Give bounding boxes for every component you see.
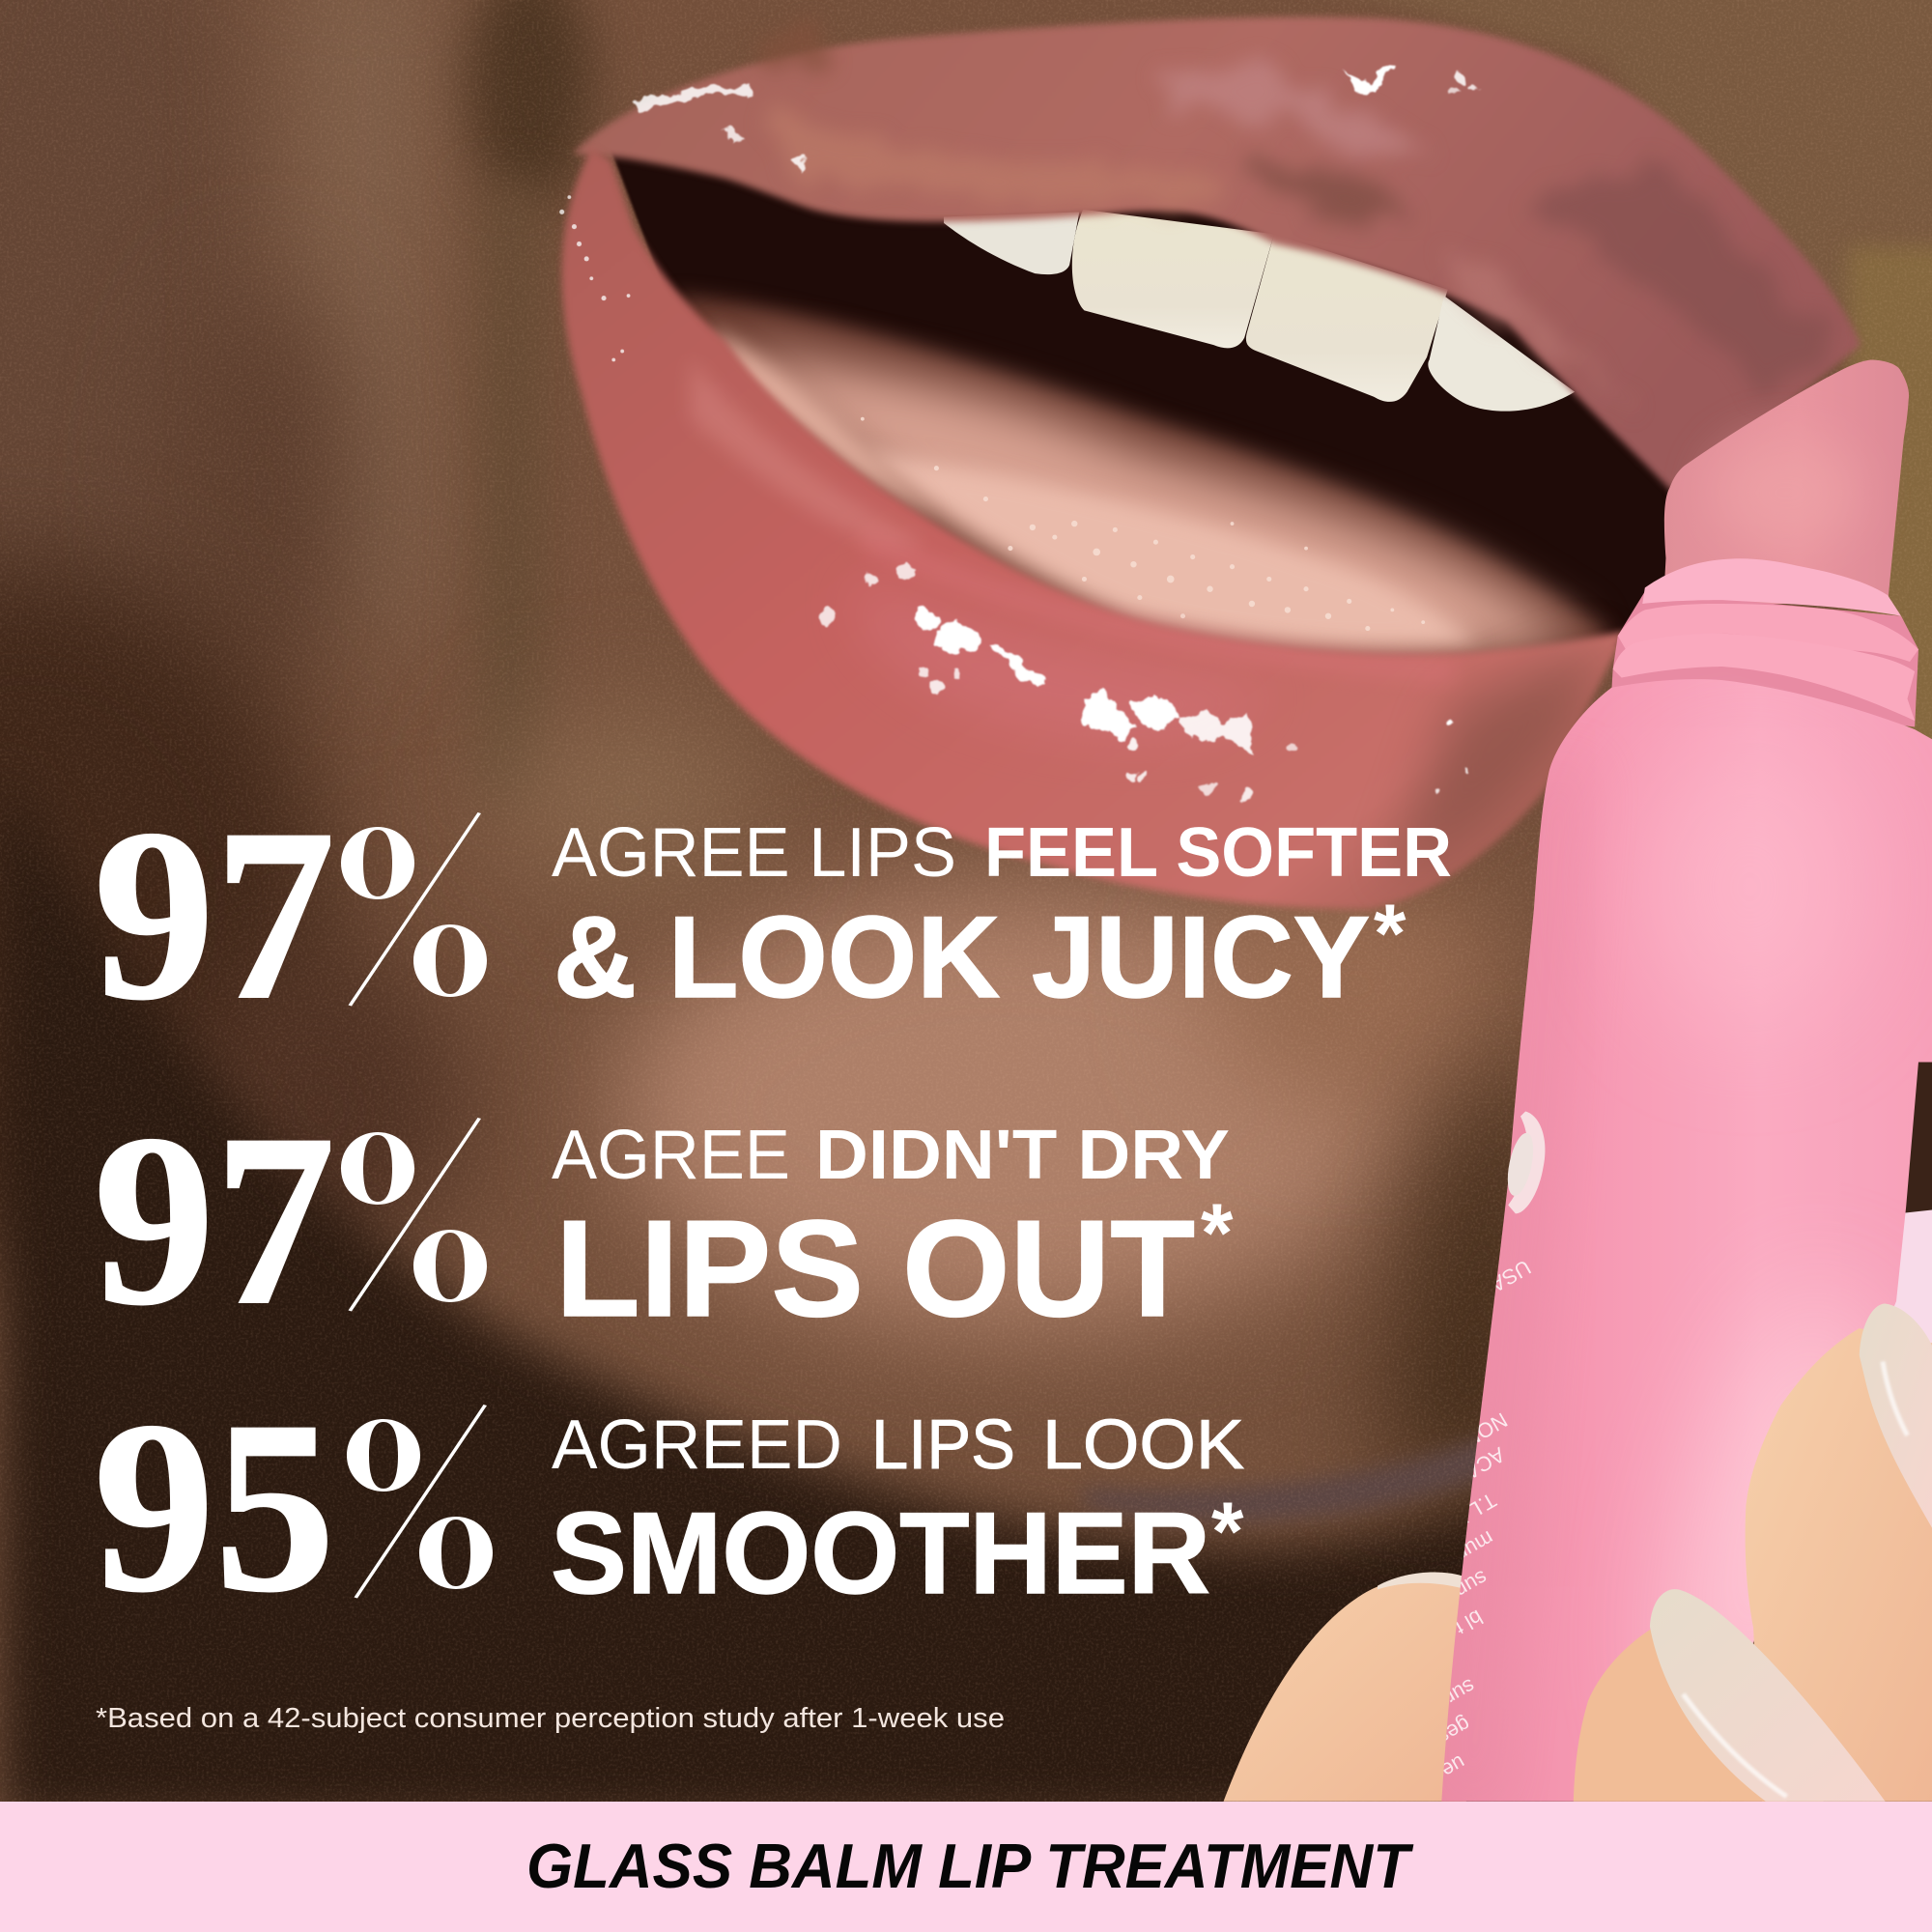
stat 2: 97% number [94,1084,487,1355]
stat 3: 95% number: % [347,1581,355,1592]
stat 3: description: LIPS [871,1406,1015,1484]
mouth interior [610,148,1676,671]
stat 3: description [551,1406,1244,1618]
upper lip [573,16,1861,493]
dark skin right of tube [1897,1035,1932,1213]
tube: balm tube with cap [1441,359,1932,1802]
stat 2: 97% number: % [341,1294,350,1305]
stat 2: description: * [1201,1187,1234,1280]
stat 2: description [552,1117,1234,1346]
stat 2: description: LIPS OUT [555,1192,1195,1346]
bottom banner [0,1802,1932,1932]
stat 3: description: * [1211,1486,1244,1578]
stat 1: 97% number: 97 [94,779,335,1050]
lip gloss highlights [819,565,1471,802]
light pink backdrop at right [1848,1202,1932,1380]
tube logo and printed text: bl t [1451,1605,1487,1640]
shadow below jaw [0,764,1565,1824]
stat 1: description: * [1374,888,1406,980]
stat 3: description: AGREED [552,1406,842,1484]
stat 1: description: FEEL SOFTER [984,814,1452,892]
stat 2: description: DIDN'T DRY [815,1117,1230,1194]
tube logo and printed text: sung [1440,1566,1492,1609]
tongue speckles [861,417,1425,631]
thumb [1224,1573,1466,1802]
lower lip [562,148,1627,909]
teeth [944,210,1575,412]
footnote: *Based on a 42-subject consumer perception study after 1-week use [96,1703,1005,1734]
left lip corner specks [559,195,630,361]
tube logo and printed text: ges [1434,1712,1475,1750]
stat 3: description: SMOOTHER [551,1489,1210,1618]
upper lip gloss highlights [635,62,1477,173]
stat 1: 97% number [94,779,487,1050]
stat 2: 97% number: 97 [94,1084,335,1355]
tube logo and printed text: ACA [1460,1442,1509,1485]
stat 2: description: AGREE [552,1117,790,1194]
tube logo and printed text: surs [1434,1674,1480,1715]
tube logo and printed text: T.L.\ [1454,1488,1500,1529]
tube logo and printed text: ue, [1433,1750,1469,1786]
stat 1: description: AGREE LIPS [552,814,956,892]
stat 3: description: LOOK [1042,1406,1244,1484]
stat 3: 95% number: 95 [94,1371,335,1642]
stat 1: description: & LOOK JUICY [554,893,1370,1022]
tongue [671,296,1607,663]
tube logo and printed text [1443,1111,1546,1774]
stat 1: description [552,814,1452,1022]
banner title: GLASS BALM LIP TREATMENT [526,1831,1414,1901]
fingers holding tube [1574,1303,1932,1802]
tube logo and printed text: NON [1460,1407,1512,1452]
stat 1: 97% number: % [341,989,350,1000]
tube logo and printed text: muro. [1439,1526,1498,1574]
tube logo and printed text: USA. [1481,1255,1535,1300]
stat 3: 95% number [94,1371,493,1642]
